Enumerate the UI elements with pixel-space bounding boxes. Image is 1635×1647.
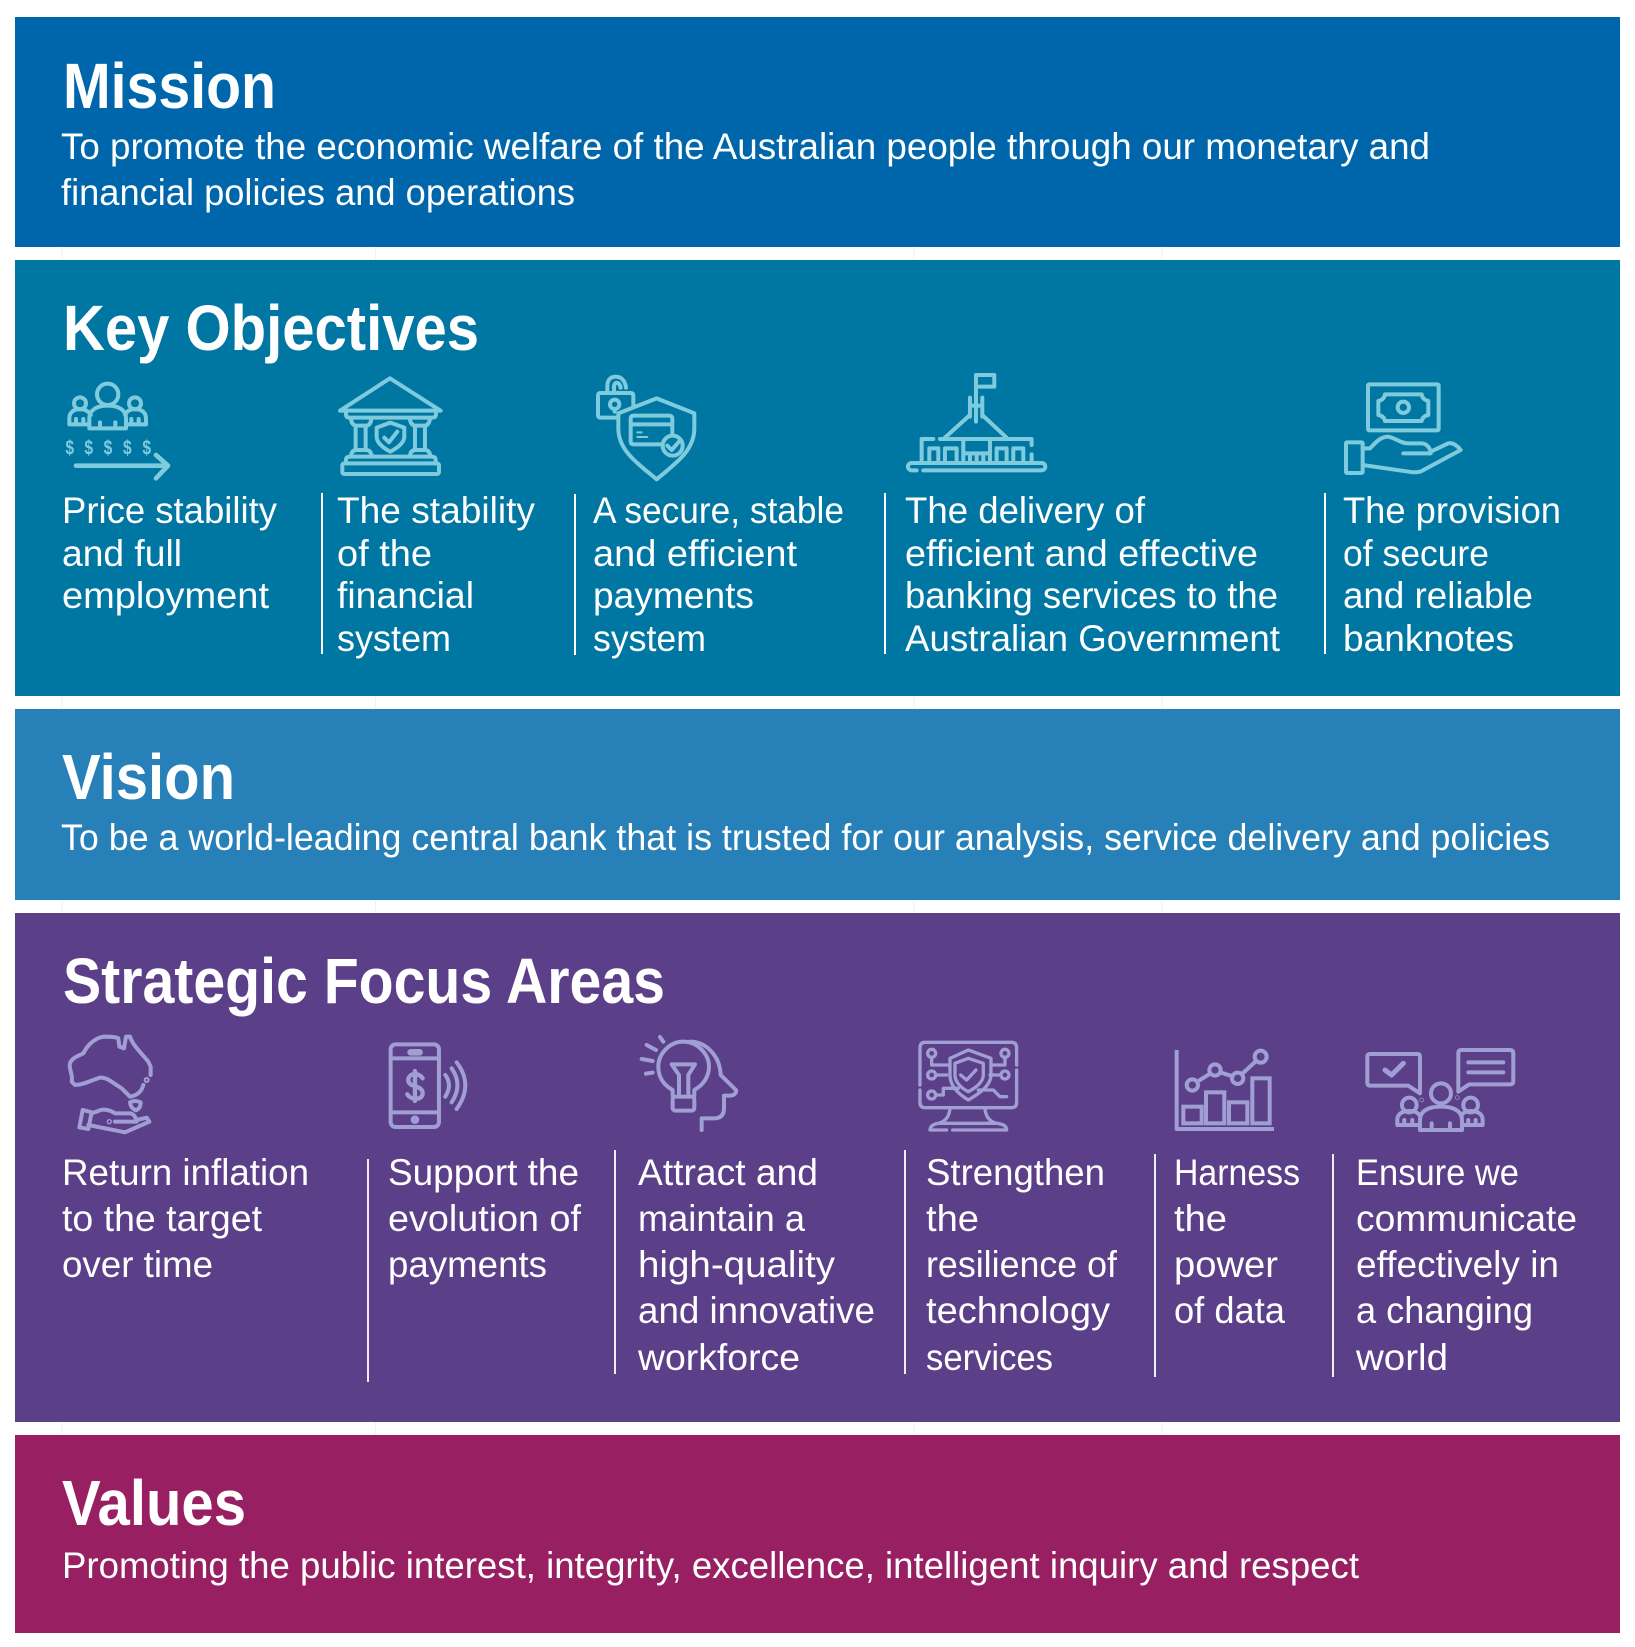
text block: workforce (637, 1152, 875, 1378)
text block: workforce: Attract and (638, 1152, 818, 1193)
icon: padlock and shield with card (598, 377, 694, 479)
text block: payments system: A secure, stable (593, 490, 844, 531)
text block: communication: a changing (1356, 1290, 1533, 1331)
text block: banking services: efficient and effective (905, 533, 1258, 574)
text block: price stability: Price stability (62, 490, 277, 531)
text block: technology resilience: services (926, 1337, 1053, 1378)
heading: Values: Values (62, 1467, 246, 1539)
text block: financial system stability: financial (337, 575, 474, 616)
icon: people, dollars and arrow: $ (65, 436, 74, 459)
text block: workforce: workforce (637, 1337, 800, 1378)
text block: power of data: of data (1174, 1290, 1285, 1331)
text block: return inflation: Return inflation (62, 1152, 309, 1193)
text block: payments system: payments (593, 575, 754, 616)
text block: mission statement: To promote the economic welfare of the Australian people through our monetary and (61, 126, 1430, 167)
icon: monitor with shield circuit (920, 1042, 1017, 1130)
icon: bar and line chart (1177, 1050, 1274, 1129)
panel: key objectives (15, 260, 1620, 696)
text block: return inflation (62, 1152, 309, 1285)
text block: communication: world (1355, 1337, 1448, 1378)
heading: Key Objectives: Key Objectives (63, 292, 479, 364)
icon: Australia above hand (70, 1037, 151, 1132)
icon: people with speech bubbles (1367, 1050, 1513, 1130)
text block: technology resilience: resilience of (926, 1244, 1118, 1285)
text block: workforce: high-quality (638, 1244, 836, 1285)
text block: technology resilience: the (926, 1198, 979, 1239)
icon: people, dollars and arrow: $ (142, 436, 151, 459)
icon: parliament house (908, 375, 1045, 470)
text block: banknotes (1343, 490, 1561, 659)
text block: mission statement: financial policies and operations (61, 172, 575, 213)
text block: financial system stability (337, 490, 535, 659)
text block: payments system: system (593, 618, 706, 659)
text block: financial system stability: The stability (337, 490, 535, 531)
text block: banknotes: The provision (1343, 490, 1561, 531)
text block: communication: effectively in (1356, 1244, 1559, 1285)
icon: people, dollars and arrow: $ (84, 436, 93, 459)
heading: Strategic Focus Areas: Strategic Focus Areas (63, 945, 665, 1017)
text block: communication (1355, 1152, 1577, 1378)
text block: financial system stability: of the (337, 533, 432, 574)
icon: hand holding banknote (1346, 384, 1461, 473)
text block: banking services: banking services to the (905, 575, 1278, 616)
text block: price stability: and full (62, 533, 182, 574)
text block: power of data (1174, 1152, 1300, 1331)
text block: communication: Ensure we (1356, 1152, 1519, 1193)
text block: banking services: The delivery of (905, 490, 1146, 531)
text block: banking services (905, 490, 1281, 659)
text block: technology resilience: Strengthen (926, 1152, 1105, 1193)
icon: people, dollars and arrow: $ (123, 436, 132, 459)
text block: payments evolution: payments (388, 1244, 547, 1285)
text block: vision statement: To be a world-leading central bank that is trusted for our analysis, service delivery and policies (61, 817, 1550, 858)
icon: people, dollars and arrow (65, 384, 168, 478)
text block: financial system stability: system (337, 618, 451, 659)
text block: workforce: and innovative (638, 1290, 875, 1331)
panel: mission (15, 17, 1620, 247)
text block: banknotes: and reliable (1343, 575, 1533, 616)
panel: vision (15, 709, 1620, 900)
text block: communication: communicate (1356, 1198, 1577, 1239)
text block: payments evolution: Support the (388, 1152, 579, 1193)
text block: payments system: and efficient (593, 533, 798, 574)
text block: payments evolution: evolution of (388, 1198, 582, 1239)
icon: bank with shield (340, 378, 441, 474)
text block: price stability: employment (62, 575, 270, 616)
text block: return inflation: over time (62, 1244, 213, 1285)
text block: price stability (62, 490, 277, 616)
text block: return inflation: to the target (62, 1198, 263, 1239)
text block: payments system (593, 490, 844, 659)
text block: values statement: Promoting the public interest, integrity, excellence, intelligent inquiry and respect (62, 1545, 1360, 1586)
text block: banking services: Australian Government (905, 618, 1281, 659)
text block: banknotes: of secure (1343, 533, 1489, 574)
heading: Mission: Mission (63, 50, 276, 122)
icon: smartphone with contactless payment (391, 1044, 465, 1127)
icon: people, dollars and arrow: $ (104, 436, 113, 459)
text block: workforce: maintain a (638, 1198, 805, 1239)
heading: Vision: Vision (62, 741, 235, 813)
text block: power of data: power (1174, 1244, 1278, 1285)
text block: mission statement (61, 126, 1430, 213)
text block: technology resilience (926, 1152, 1118, 1378)
panel: values (15, 1435, 1620, 1633)
text block: power of data: the (1174, 1198, 1227, 1239)
icon: light bulb in head (642, 1037, 736, 1130)
panel: strategic focus areas (15, 913, 1620, 1422)
text block: technology resilience: technology (926, 1290, 1111, 1331)
text block: banknotes: banknotes (1343, 618, 1514, 659)
text block: power of data: Harness (1174, 1152, 1300, 1193)
text block: payments evolution (388, 1152, 582, 1285)
